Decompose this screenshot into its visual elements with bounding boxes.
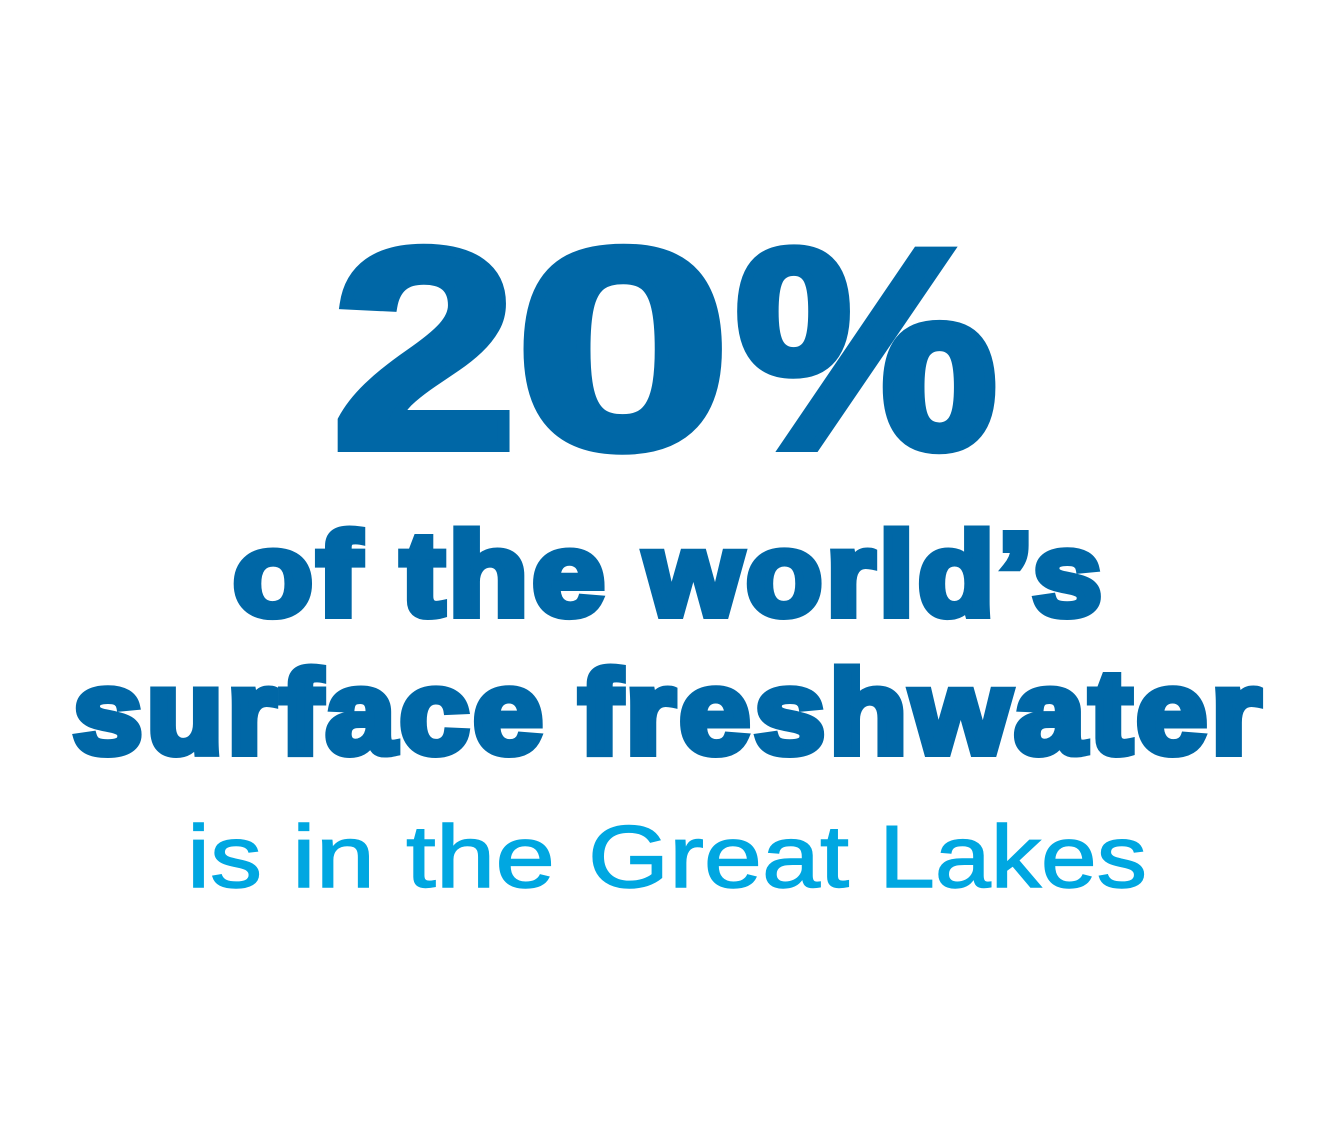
statistic: 20%: [332, 191, 998, 508]
heading line: surface freshwater: [73, 647, 1265, 779]
subheading: is in the Great Lakes: Lakes: [879, 807, 1147, 906]
subheading: is in the Great Lakes: the: [406, 807, 555, 906]
subheading: is in the Great Lakes: Great: [588, 807, 849, 906]
heading line: surface freshwater: surface: [73, 647, 547, 779]
subheading: is in the Great Lakes: [187, 807, 1147, 906]
heading line: of the world's: of: [233, 509, 365, 641]
subheading: is in the Great Lakes: in: [292, 807, 375, 906]
heading line: of the world's: the: [401, 509, 609, 641]
heading line: of the world's: world’s: [644, 509, 1106, 641]
statistic: 20%: 2: [332, 191, 517, 508]
subheading: is in the Great Lakes: is: [187, 807, 262, 906]
heading line: of the world's: [233, 509, 1106, 641]
heading line: surface freshwater: freshwater: [579, 647, 1265, 779]
statistic: 20%: 0: [515, 191, 731, 508]
statistic: 20%: %: [735, 191, 998, 508]
